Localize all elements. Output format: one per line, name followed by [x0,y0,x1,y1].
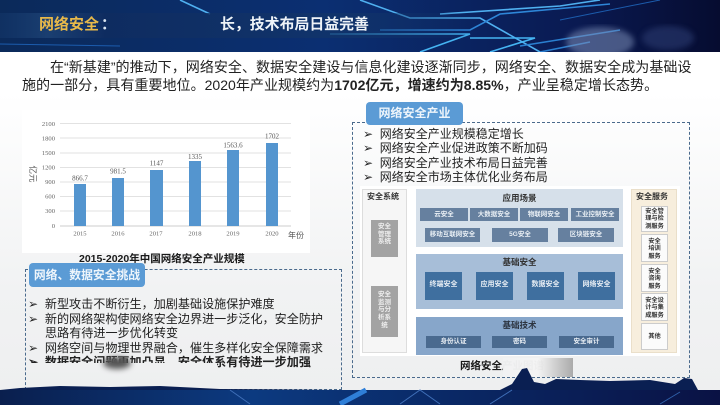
footer banner [0,368,720,405]
service: other: 其他 [648,333,661,340]
intro paragraph: 施的一部分，具有重要地位。2020年产业规模约为1702亿元，增速约为8.85%，产业呈稳定增长态势。 [22,76,658,92]
box: security management system: 管理 [378,231,391,238]
tile: 5G security: 5G安全 [509,231,531,238]
x labels: 2020 [265,230,279,238]
box: security monitoring system: 安全 [378,291,391,298]
tile: security audit [559,336,614,348]
y axis labels: 600 [45,194,56,200]
box: security monitoring system: 监测 [378,299,391,306]
tile: cloud security [420,208,468,221]
tile: IoT security: 物联网安全 [528,211,560,218]
title [39,16,369,33]
heading: security services: 安全服务 [636,192,668,201]
service: design and integration: 成服务 [645,312,664,319]
column: security services [631,189,677,353]
tile: blockchain security [558,228,614,242]
torn mask over bullet text [27,363,217,372]
bullet list: ➢ 网络空间与物理世界融合，催生多样化安全保障需求 [28,340,323,354]
panel heading [29,263,145,287]
panel: challenges [25,263,342,390]
tile: application security [476,272,513,300]
title: ： [101,16,116,33]
tile: 5G security [492,228,548,242]
grey smear over bullet [103,357,131,369]
axis title: 亿元 [28,165,38,183]
industry bullet list: ➢ 网络安全产业促进政策不断加码 [363,141,548,155]
service: management and testing: 测服务 [645,223,664,230]
bullet list: ➢ 数据安全问题更加凸显，安全体系有待进一步加强 [28,355,311,369]
tile: application security: 应用安全 [480,281,508,288]
panel heading: 网络安全产业 [378,106,450,120]
tile: data security [527,272,564,300]
tile: security audit: 安全审计 [574,338,600,345]
box: security management system: 安全 [378,223,391,230]
tile: industrial control security: 工业控制安全 [576,211,614,218]
intro paragraph: 在“新基建”的推动下，网络安全、数据安全建设与信息化建设逐渐同步，网络安全、数据安全成为基础设 [50,59,691,75]
panel heading [366,102,463,125]
tile: endpoint security: 终端安全 [430,281,458,288]
value labels: 1563.6 [223,142,243,150]
y axis labels: 1800 [42,136,56,142]
panel heading: 网络、数据安全挑战 [34,268,140,282]
tile: mobile internet security: 移动互联网安全 [430,231,475,238]
panel: industry [352,102,690,378]
industry bullet list: ➢ 网络安全产业规模稳定增长 [363,127,524,141]
service: training [641,234,668,262]
intro paragraph [22,59,691,92]
bullet list: 思路有待进一步优化转变 [45,326,178,340]
title: 长，技术布局日益完善 [220,17,369,33]
value labels: 1147 [150,160,164,168]
industry bullet list [363,127,548,184]
bars [74,143,278,226]
service: design and integration: 计与集 [645,304,664,311]
service: consulting: 服务 [648,283,661,290]
x labels [73,230,279,238]
bullet list: ➢ 新的网络架构使网络安全边界进一步泛化，安全防护 [28,312,323,326]
heading: security systems: 安全系统 [367,192,399,201]
industry bullet list: ➢ 网络安全市场主体优化业务布局 [363,170,548,184]
service: other [641,323,668,350]
tile: identity authentication [426,336,481,348]
diagram caption: 网络安全产业图谱 [460,360,544,372]
tile: IoT security [520,208,568,221]
y axis labels [42,121,56,230]
service: consulting: 咨询 [648,275,661,282]
industry bullet list: ➢ 网络安全产业技术布局日益完善 [363,156,548,170]
tile: identity authentication: 身份认证 [440,338,466,345]
y axis labels: 1200 [42,164,56,172]
dashed frame [25,269,342,390]
chart caption: 2015-2020年中国网络安全产业规模 [79,253,245,265]
service: design and integration [641,293,668,321]
box: security monitoring system [371,286,398,337]
service: design and integration: 安全设 [645,297,664,304]
bullet list: ➢ 新型攻击不断衍生，加剧基础设施保护难度 [28,297,275,311]
service: consulting: 安全 [648,268,661,275]
heading: foundational security: 基础安全 [502,257,536,267]
box: security management system [371,220,398,257]
service: management and testing: 安全管 [645,208,664,215]
service: training: 安全 [648,238,661,245]
header banner [0,0,720,52]
x labels: 2019 [226,230,240,238]
tile: network security [578,272,615,300]
service: training: 培训 [648,245,661,252]
bar chart: 年份 [288,230,304,240]
tile: cloud security: 云安全 [434,211,454,218]
value labels: 1702 [265,132,280,140]
x labels: 2015 [73,230,87,238]
box: security management system: 系统 [378,238,391,245]
y axis labels: 0 [52,223,56,230]
diagram: security panorama [360,186,680,356]
box: security monitoring system: 统 [381,322,388,329]
service: management and testing [641,206,668,232]
x labels: 2016 [111,230,125,238]
bullet list [28,297,323,369]
white smear covering caption [503,358,573,377]
y axis labels: 2100 [42,121,56,128]
tile: cryptography: 密码 [513,338,526,345]
tile: data security: 数据安全 [532,281,560,288]
tile: endpoint security [425,272,462,300]
x labels: 2018 [188,230,202,238]
value labels: 1335 [188,153,202,161]
tile: cryptography [492,336,547,348]
block: foundational security [416,254,623,309]
x labels: 2017 [149,230,163,238]
value labels [72,132,280,182]
tile: industrial control security [571,208,619,221]
block: application scenarios [416,189,623,247]
y axis labels: 900 [45,179,56,186]
box: security monitoring system: 与分 [378,306,391,313]
heading: foundational technology: 基础技术 [502,320,536,330]
service: management and testing: 理与检 [645,215,664,222]
service: training: 服务 [648,253,661,260]
service: consulting [641,264,668,292]
dashed frame [352,122,690,378]
box: security monitoring system: 析系 [378,314,391,321]
block: foundational technology [416,317,623,355]
heading: application scenarios: 应用场景 [502,193,536,203]
tile: big data security [470,208,518,221]
value labels: 866.7 [72,174,88,182]
column: security systems [362,189,407,353]
y axis labels: 300 [45,208,56,215]
title: 网络安全 [39,16,99,33]
tile: big data security: 大数据安全 [478,211,510,218]
y axis labels: 1500 [42,150,56,157]
tile: network security: 网络安全 [582,281,610,288]
value labels: 981.5 [110,168,126,176]
tile: mobile internet security [425,228,480,242]
bar chart [22,121,310,253]
tile: blockchain security: 区块链安全 [570,231,602,238]
